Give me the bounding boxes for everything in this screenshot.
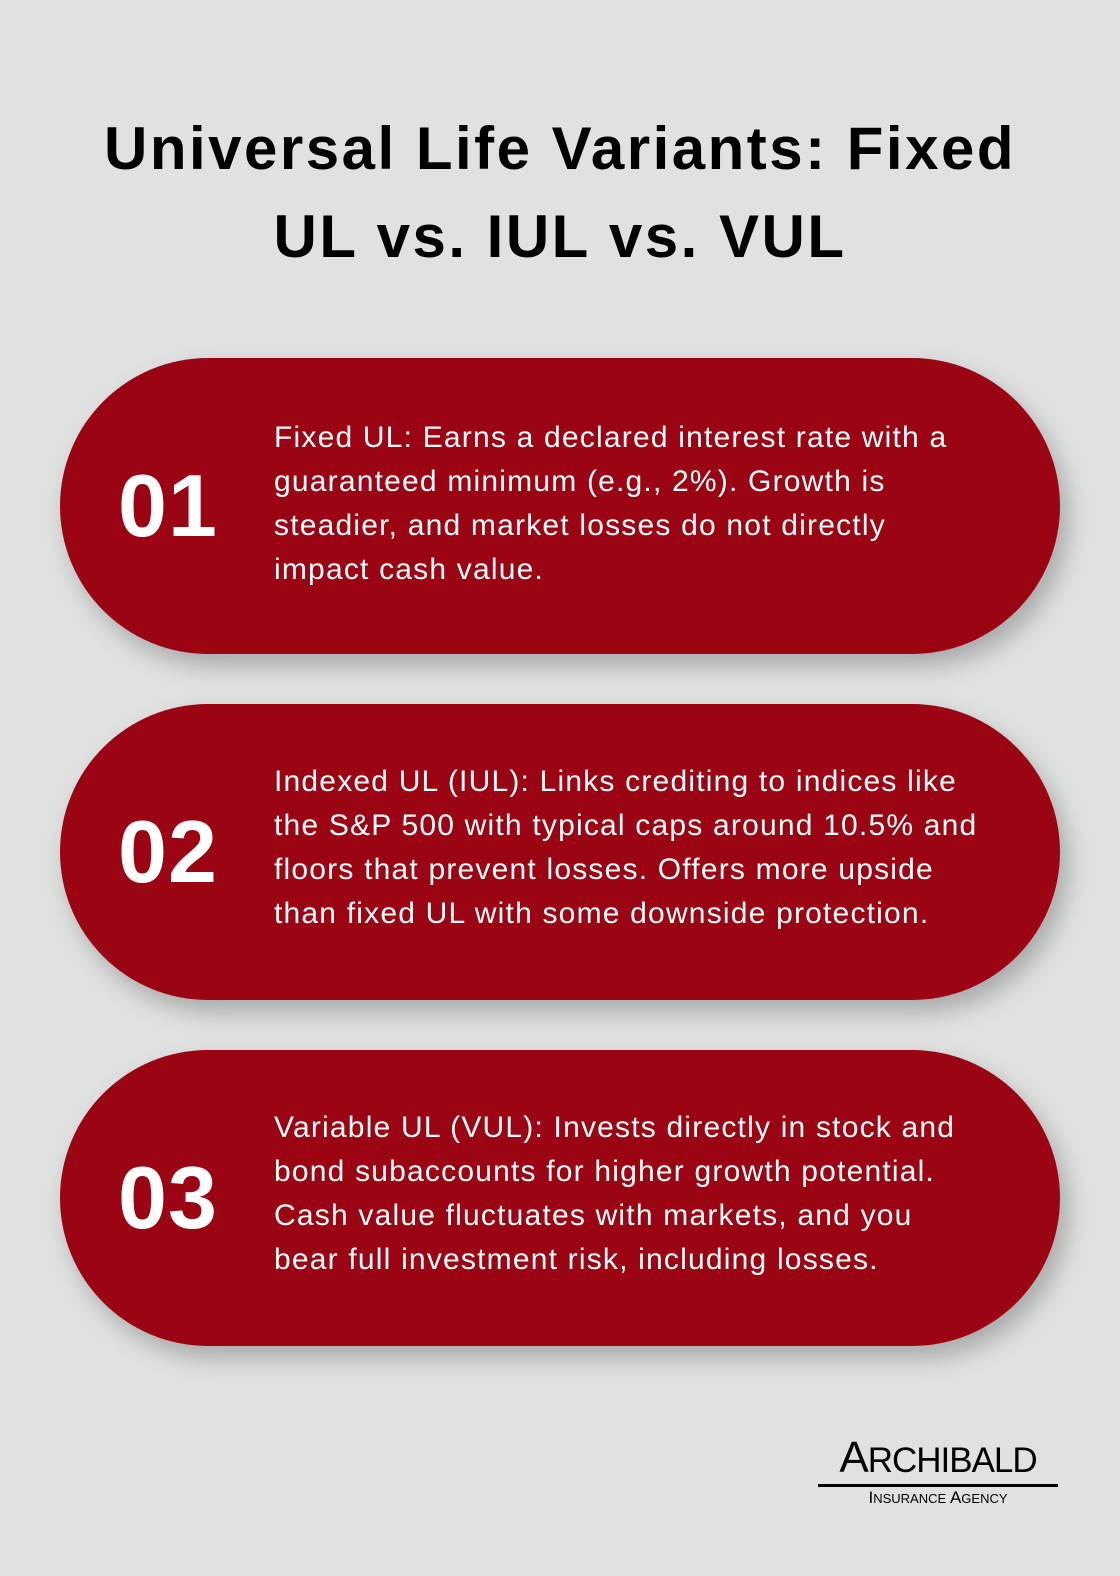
logo [818, 1433, 1058, 1507]
text: variable UL: bond subaccounts for higher growth potential. [274, 1155, 935, 1188]
text: variable UL: bear full investment risk, including losses. [274, 1243, 879, 1276]
panel: indexed UL [60, 704, 1060, 1000]
text: indexed UL [274, 765, 977, 930]
number 03: 03 [118, 1148, 218, 1247]
text: indexed UL: the S&P 500 with typical caps around 10.5% and [274, 809, 977, 842]
text: indexed UL: Indexed UL (IUL): Links crediting to indices like [274, 765, 957, 798]
number 02: 02 [118, 802, 218, 901]
title [104, 115, 1016, 270]
text: fixed UL: guaranteed minimum (e.g., 2%). Growth is [274, 465, 886, 498]
text: fixed UL: impact cash value. [274, 553, 544, 586]
logo: INSURANCE AGENCY [868, 1488, 1008, 1507]
logo: ARCHIBALD [839, 1433, 1037, 1482]
text: fixed UL [274, 421, 947, 586]
title: UL vs. IUL vs. VUL [274, 203, 846, 270]
title: Universal Life Variants: Fixed [104, 115, 1016, 182]
text: indexed UL: than fixed UL with some downside protection. [274, 897, 929, 930]
text: fixed UL: Fixed UL: Earns a declared interest rate with a [274, 421, 947, 454]
text: variable UL: Cash value fluctuates with markets, and you [274, 1199, 913, 1232]
panel: fixed UL [60, 358, 1060, 654]
text: fixed UL: steadier, and market losses do not directly [274, 509, 886, 542]
panel: variable UL [60, 1050, 1060, 1346]
text: indexed UL: floors that prevent losses. Offers more upside [274, 853, 934, 886]
text: variable UL: Variable UL (VUL): Invests directly in stock and [274, 1111, 955, 1144]
text: variable UL [274, 1111, 955, 1276]
number 01: 01 [118, 456, 218, 555]
